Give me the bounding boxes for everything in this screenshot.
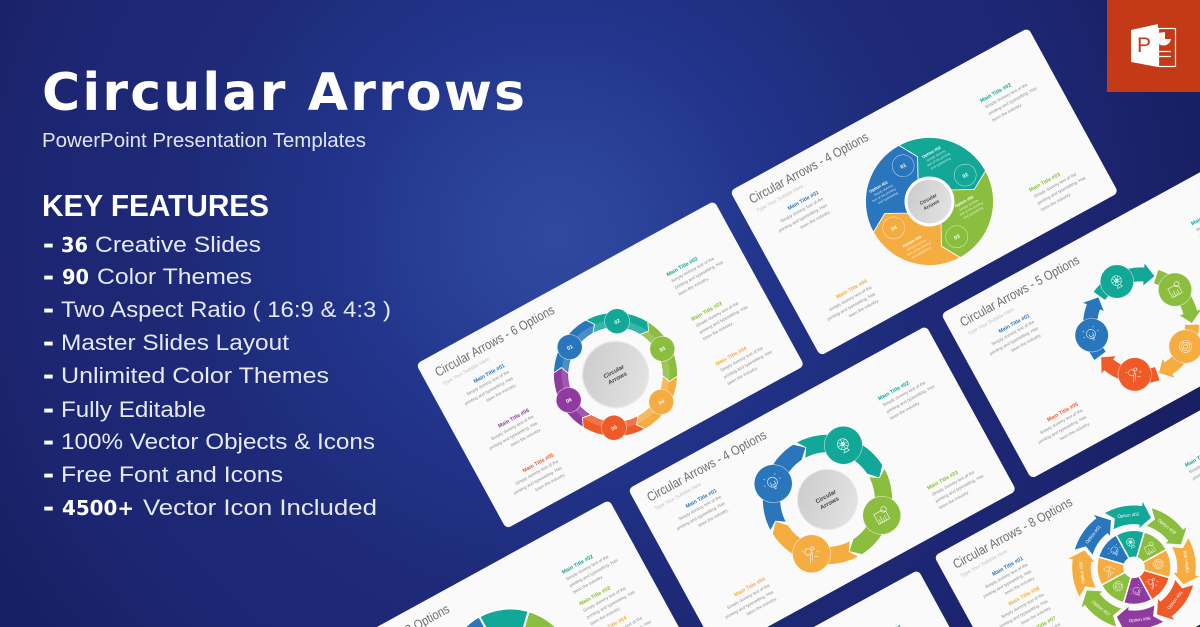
text block: main title 02: printing and typesetting. Has (885, 384, 935, 414)
slide subtitle: Type Your Subtitle Here (654, 482, 703, 512)
outer arrows and inner wedges diagram: Option #07 (1091, 599, 1112, 617)
text block: main title 02: printing and typesetting. Has (568, 558, 618, 588)
text block: main title 03: Simply dummy text of the (1033, 171, 1078, 199)
text block: main title 04: Main Title #04 (733, 577, 767, 598)
text block: main title 02: Main Title #02 (877, 380, 911, 402)
slide: 4 options circular (628, 326, 1016, 627)
feature: free font: - (43, 455, 54, 491)
feature: unlimited color themes: Unlimited Color Themes (61, 363, 329, 388)
text block: main title 03: Simply dummy text of the (582, 585, 627, 613)
text block: main title 08: Simply dummy text of the (1000, 591, 1045, 619)
text block: main title 02: been the industry. (678, 276, 710, 296)
outer arrows and inner wedges diagram: Option #06 (1128, 616, 1151, 623)
pie arrow diagram: Arrows (923, 199, 941, 212)
text block: main title 04: Simply dummy text of the (828, 284, 873, 312)
pie arrow diagram: Simply dummy (873, 183, 894, 197)
text block: main title 01 (770, 189, 832, 240)
feature: 36 creative slides: Creative Slides (95, 232, 261, 257)
outer arrows and inner wedges diagram: Option #02 (1117, 511, 1140, 519)
text block: main title 03: Main Title #03 (690, 301, 724, 323)
pie arrow diagram: 01 (900, 163, 908, 171)
circular arrow diagram: 01 (566, 344, 574, 352)
text block: main title 03: printing and typesetting. Has (934, 473, 984, 503)
text block: main title 01: printing and typesetting. Has (989, 326, 1039, 356)
text block: main title 04 (717, 576, 778, 626)
text block: main title 04: printing and typesetting. Has (723, 349, 773, 379)
feature list (43, 225, 391, 524)
text block: main title 02: Main Title #02 (979, 82, 1013, 104)
slide subtitle: Type Your Subtitle Here (442, 357, 491, 387)
text block: main title 01: Main Title #01 (787, 190, 820, 212)
text block: main title 03: Main Title #03 (579, 585, 612, 607)
text block: main title 02: Simply dummy text of the (670, 256, 715, 283)
text block: main title 03 (926, 460, 988, 511)
pie arrow diagram: Simply dummy (926, 149, 947, 163)
text block: main title 03: been the industry. (702, 321, 734, 341)
text block: main title 06: Simply dummy text of the (490, 414, 535, 441)
circular arrow diagram: 02 (614, 318, 622, 326)
feature: 4500+ icons: - (43, 488, 54, 524)
text block: main title 03: Simply dummy text of the (695, 300, 740, 328)
feature: master slides (43, 323, 290, 359)
text block: main title 03 (579, 576, 639, 626)
text block: main title 08: been the industry. (1020, 605, 1052, 626)
feature: 90 color themes (43, 257, 252, 293)
circular arrow diagram: Arrows (819, 496, 841, 511)
text block: main title 01: been the industry. (697, 507, 729, 528)
text block: main title 01: Simply dummy text of the (678, 494, 723, 522)
circular arrow diagram: 05 (610, 425, 618, 433)
text block: main title 04: Simply dummy text of the (726, 582, 771, 610)
feature: aspect ratio: Two Aspect Ratio ( 16:9 & 4:3 ) (61, 297, 391, 322)
text block: main title 02: been the industry. (889, 400, 921, 421)
text block: main title 06: printing and typesetting. Has (488, 420, 538, 451)
text block: main title 01: been the industry. (485, 382, 517, 403)
feature: aspect ratio (43, 290, 391, 326)
text block: main title 02 (979, 72, 1041, 123)
text block: main title 06 (481, 407, 542, 457)
text block: main title 04: Main Title #04 (835, 279, 869, 300)
text block: main title 03: been the industry. (938, 489, 970, 510)
text block: main title 08: Main Title #08 (1008, 586, 1041, 608)
text block: main title 04: printing and typesetting. Has (724, 589, 774, 620)
pie arrow diagram: text of the printing (926, 151, 951, 168)
feature: aspect ratio: - (43, 290, 54, 326)
pie arrow diagram: text of the printing (959, 201, 984, 217)
pie arrow diagram: and typesetting (930, 156, 952, 171)
feature: 4500+ icons (43, 488, 377, 524)
powerpoint badge (1107, 0, 1200, 92)
text block: main title 05 (1030, 401, 1091, 451)
text block: main title 02 (1184, 437, 1200, 481)
text block: main title 04: printing and typesetting. Has (826, 291, 876, 322)
text block: main title 06: Main Title #06 (497, 408, 531, 430)
text block: main title 01: been the industry. (799, 209, 831, 230)
pie arrow diagram: Circular (919, 193, 938, 207)
text block: main title 04: Main Title #04 (715, 346, 748, 368)
icon: wedge gear (500, 626, 514, 627)
feature: 36 creative slides: 36 (61, 233, 88, 257)
text block: main title 04 (595, 606, 652, 627)
text block: main title 03: Main Title #03 (926, 470, 960, 492)
text block: main title 02: been the industry. (991, 102, 1023, 123)
text block: main title 01: Simply dummy text of the (466, 369, 511, 397)
text block: main title 04 (819, 278, 880, 328)
feature: fully editable (43, 390, 206, 426)
subtitle: PowerPoint Presentation Templates (42, 130, 366, 152)
text block: main title 01 (981, 312, 1043, 363)
text block: main title 01 (668, 487, 730, 538)
feature: 4500+ icons: Vector Icon Included (143, 495, 377, 520)
text block: main title 05: Simply dummy text of the (514, 458, 560, 486)
slide: 6 options (416, 201, 804, 529)
pie arrow diagram: text of the printing (871, 187, 896, 203)
outer arrows and inner wedges diagram: Option #03 (1157, 518, 1177, 536)
text block: main title 03: been the industry. (589, 606, 621, 626)
text block: main title 04: been the industry. (746, 596, 778, 616)
text block: main title 05: printing and typesetting. Has (513, 465, 563, 496)
text block: main title 05: printing and typesetting. Has (1037, 414, 1087, 445)
text block: main title 08 (991, 585, 1053, 627)
feature: vector objects: 100% Vector Objects & Icons (61, 429, 375, 454)
feature: free font (43, 455, 283, 491)
pie arrow diagram: Option #01 (868, 179, 889, 194)
slide subtitle: Type Your Subtitle Here (756, 184, 805, 214)
text block: main title 03 (690, 291, 752, 342)
text block: main title 01: Main Title #01 (991, 556, 1025, 578)
text block: main title 01: printing and typesetting. Has (676, 501, 726, 531)
text block: main title 01: Simply dummy text of the (991, 319, 1036, 347)
text block: main title 06: been the industry. (510, 427, 542, 448)
pie arrow diagram: Simply dummy (958, 198, 979, 212)
slide: 5 options (941, 151, 1200, 479)
text block: main title 02 (561, 544, 622, 595)
feature: unlimited color themes: - (43, 356, 54, 392)
icon: powerpoint logo: P (1137, 34, 1151, 57)
circular arrow diagram (738, 410, 917, 589)
text block: main title 05: been the industry. (1059, 421, 1091, 441)
text block: main title 03: printing and typesetting. Has (1036, 175, 1086, 205)
text block: main title 05: Main Title #05 (1046, 402, 1080, 423)
pie arrow diagram: 04 (890, 225, 898, 233)
text block: main title 02 (666, 246, 728, 297)
slide subtitle: Type Your Subtitle Here (967, 307, 1016, 337)
pie arrow diagram: Option #04 (902, 234, 923, 249)
feature: unlimited color themes (43, 356, 329, 392)
text block: main title 01: Main Title #01 (685, 488, 718, 510)
text block: main title 05: Main Title #05 (522, 452, 555, 474)
text block: main title 03: printing and typesetting. Has (698, 304, 748, 335)
outer arrows and inner wedges diagram: Option #04 (1182, 550, 1190, 573)
slide title: Circular Arrows - 8 Options (950, 494, 1075, 572)
text block: main title 03 (1028, 162, 1090, 213)
pie arrow diagram: 03 (953, 234, 961, 242)
circular arrow diagram: Circular (815, 489, 838, 505)
outer arrows and inner wedges diagram: Option #01 (1084, 524, 1102, 545)
text block: main title 02: Simply dummy text of the (984, 82, 1029, 109)
feature: 4500+ icons: 4500+ (62, 496, 134, 520)
pie arrow diagram: and typesetting (877, 191, 899, 205)
feature: 36 creative slides: - (43, 225, 54, 261)
pie arrow diagram: Option #03 (954, 194, 975, 209)
feature: 90 color themes: - (43, 257, 54, 293)
circular arrow diagram: 03 (659, 346, 667, 354)
feature: free font: Free Font and Icons (61, 462, 283, 487)
feature: vector objects: - (43, 422, 54, 458)
text block: main title 01 (975, 555, 1036, 606)
pie arrow diagram: text of the printing (907, 241, 932, 257)
text block: main title 02: Main Title #02 (666, 256, 699, 278)
pie arrow diagram: and typesetting (963, 206, 984, 220)
text block: main title 02: Simply dummy text of the (882, 380, 927, 407)
text block: main title 02 (877, 370, 939, 421)
feature: fully editable: Fully Editable (61, 397, 206, 422)
text block: main title 02 (1190, 195, 1200, 240)
text block: main title 04: been the industry. (726, 365, 758, 386)
feature: 36 creative slides (43, 225, 261, 261)
circular arrow diagram (1052, 235, 1200, 416)
text block: main title 01: been the industry. (1010, 332, 1042, 353)
pie arrow diagram (843, 115, 1016, 288)
outer arrows and inner wedges diagram: Option #08 (1078, 561, 1085, 584)
circular arrow diagram (508, 268, 723, 481)
text block: main title 01: printing and typesetting. Has (982, 569, 1032, 599)
slide title: Circular Arrows - 4 Options (746, 129, 871, 207)
text block: main title 02: been the industry. (572, 574, 604, 595)
text block: main title 03: been the industry. (1040, 191, 1072, 212)
text block: main title 02: printing and typesetting. Has (987, 86, 1037, 116)
text block: main title 02: printing and typesetting. Has (674, 259, 724, 290)
circular arrow diagram: 06 (565, 397, 573, 405)
text block: main title 01: printing and typesetting. Has (464, 376, 514, 406)
slide title: Circular Arrows - 5 Options (957, 252, 1082, 330)
text block: main title 03: printing and typesetting. Has (586, 589, 636, 620)
outer arrows and inner wedges diagram (1037, 470, 1200, 627)
text block: main title 01 (456, 362, 518, 413)
slide title: Circular Arrows - 4 Options (644, 427, 769, 505)
key features heading: KEY FEATURES (42, 188, 269, 223)
feature: 90 color themes: Color Themes (97, 264, 252, 289)
text block: main title 01: Main Title #01 (998, 313, 1031, 335)
slide: 4 options pie (730, 28, 1118, 356)
text block: main title 01: Main Title #01 (473, 363, 506, 385)
circular arrow diagram: Circular (603, 364, 626, 380)
slide: 8 options (934, 393, 1200, 627)
text block: main title 02: Main Title #02 (561, 554, 594, 576)
text block: main title 04 (715, 336, 776, 386)
pie arrow diagram: 02 (962, 172, 970, 180)
pie arrow diagram: Option #02 (921, 145, 942, 159)
text block: main title 07 (1008, 615, 1065, 627)
feature: master slides: Master Slides Layout (61, 330, 290, 355)
feature: master slides: - (43, 323, 54, 359)
text block: main title 05 (505, 452, 567, 502)
text block: main title 04: Simply dummy text of the (719, 345, 764, 373)
circular arrow diagram: 04 (658, 399, 666, 407)
pie diagram (433, 567, 601, 627)
text block: main title 01: Simply dummy text of the (984, 562, 1029, 589)
slide subtitle: Type Your Subtitle Here (960, 549, 1009, 579)
text block: main title 03: Main Title #03 (1028, 172, 1062, 194)
text block: main title 04: been the industry. (848, 298, 880, 318)
feature: 90 color themes: 90 (62, 265, 89, 289)
text block: main title 05: been the industry. (534, 472, 566, 492)
text block: main title 01: Simply dummy text of the (780, 196, 825, 224)
slide title: Circular Arrows - 6 Options (432, 302, 557, 380)
feature: vector objects (43, 422, 375, 458)
outer arrows and inner wedges diagram: Option #05 (1166, 590, 1184, 610)
pie arrow diagram: Simply dummy (906, 238, 927, 252)
text block: main title 01: printing and typesetting. Has (778, 203, 828, 233)
text block: main title 03: Simply dummy text of the (931, 469, 976, 497)
text block: main title 05: Simply dummy text of the (1039, 407, 1084, 435)
title: Circular Arrows (42, 63, 525, 123)
slide: 4 options circular, bottom partial (620, 570, 1008, 627)
text block: main title 01: been the industry. (1004, 575, 1036, 596)
feature: fully editable: - (43, 390, 54, 426)
pie arrow diagram: and typesetting (910, 246, 932, 260)
slide: 8 options partial, lower left (311, 500, 699, 627)
circular arrow diagram: Arrows (607, 371, 629, 386)
text block: main title 02: Simply dummy text of the (565, 554, 610, 581)
